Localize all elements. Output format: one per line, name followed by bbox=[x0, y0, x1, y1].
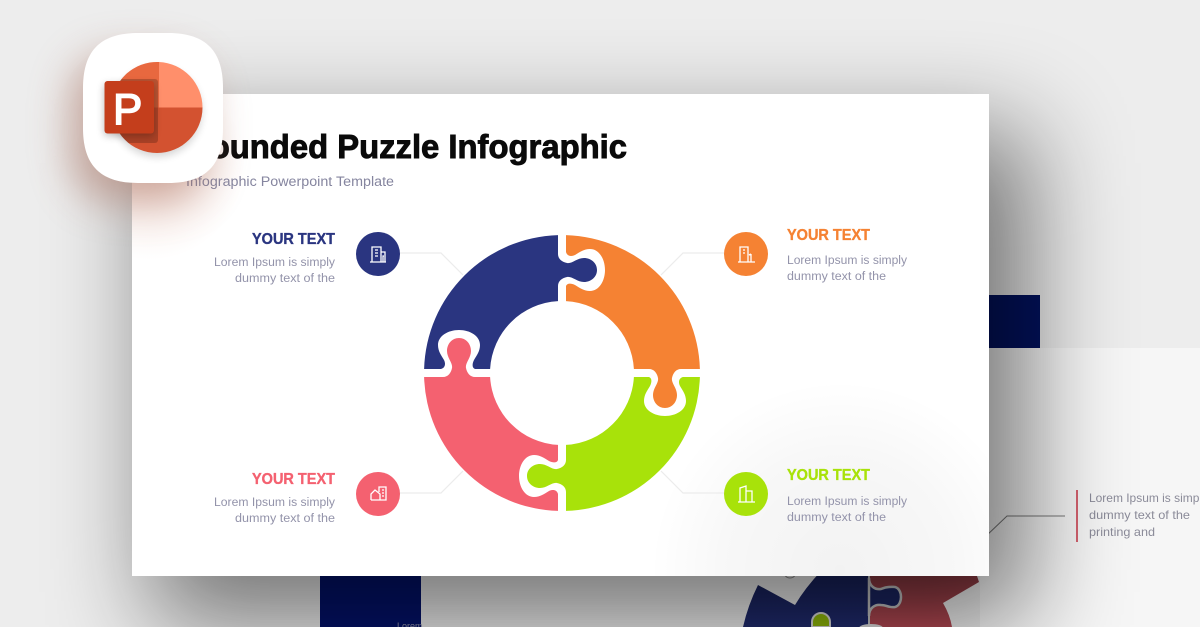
slide glow bbox=[132, 94, 332, 284]
logo disc top right bbox=[159, 62, 203, 108]
body text bbox=[214, 257, 335, 285]
heading: YOUR TEXT bbox=[252, 231, 335, 248]
body text: dummy text of the bbox=[235, 273, 335, 285]
title: Rounded Puzzle Infographic bbox=[186, 128, 627, 165]
background ring hints bbox=[784, 566, 796, 578]
callout: top right bbox=[724, 227, 907, 283]
body text: Lorem Ipsum is simply bbox=[787, 496, 907, 508]
body text: Lorem Ipsum is simply bbox=[214, 257, 335, 269]
background slide: lower right bbox=[980, 348, 1200, 627]
heading: YOUR TEXT bbox=[252, 471, 335, 488]
callout: top left bbox=[214, 231, 400, 285]
red rule bbox=[1076, 490, 1078, 542]
icon: office building bbox=[356, 232, 400, 276]
body text bbox=[214, 497, 335, 525]
background puzzle red piece bbox=[870, 570, 979, 627]
logo shadow bbox=[112, 67, 202, 157]
body text: dummy text of the bbox=[787, 271, 886, 283]
icon: door building bbox=[724, 232, 768, 276]
body text bbox=[1089, 491, 1200, 539]
logo inner shade bbox=[120, 79, 158, 143]
puzzle piece: orange bbox=[566, 235, 700, 408]
body text: dummy text of the bbox=[1089, 508, 1190, 522]
puzzle piece: navy bbox=[424, 235, 597, 369]
card shadow bbox=[150, 130, 1030, 625]
icon: house and tower bbox=[356, 472, 400, 516]
body text: dummy text of the bbox=[787, 512, 886, 524]
body text: printing and bbox=[1089, 525, 1155, 539]
chart: rounded puzzle ring bbox=[424, 235, 700, 511]
logo letter: P bbox=[113, 85, 142, 134]
background puzzle: partial bbox=[743, 566, 979, 627]
background text: right bbox=[985, 490, 1200, 542]
callout: bottom right bbox=[724, 467, 907, 524]
body text: dummy text of the bbox=[235, 513, 335, 525]
background puzzle navy piece bbox=[743, 570, 868, 627]
callout: bottom left bbox=[214, 471, 400, 525]
panel: main slide bbox=[132, 94, 989, 576]
badge squircle bbox=[83, 33, 223, 183]
puzzle piece: green bbox=[527, 377, 700, 511]
background puzzle seam bbox=[868, 576, 870, 627]
heading: YOUR TEXT bbox=[787, 467, 870, 484]
background navy block: bottom bbox=[320, 570, 421, 627]
icon: PowerPoint app badge bbox=[69, 33, 223, 203]
background puzzle tab bbox=[869, 578, 901, 616]
body text: Lorem Ipsum is simply bbox=[214, 497, 335, 509]
background puzzle green tab bbox=[812, 613, 830, 627]
background navy block: right bbox=[989, 295, 1040, 348]
body text bbox=[787, 255, 907, 283]
connector lines bbox=[400, 253, 724, 493]
subtitle: Infographic Powerpoint Template bbox=[186, 174, 394, 189]
logo square shadow bbox=[104, 84, 154, 136]
slide tint bbox=[132, 94, 989, 576]
logo square bbox=[104, 81, 154, 134]
heading: YOUR TEXT bbox=[787, 227, 870, 244]
slide card bbox=[132, 94, 989, 576]
background puzzle white tab bbox=[859, 624, 883, 627]
body text bbox=[787, 496, 907, 524]
body text: Lorem Ipsum is simply bbox=[787, 255, 907, 267]
connector line bbox=[985, 516, 1065, 537]
icon: towers bbox=[724, 472, 768, 516]
puzzle piece: pink bbox=[424, 338, 558, 511]
logo disc top left bbox=[111, 62, 159, 108]
badge glow bbox=[69, 53, 209, 203]
logo disc bottom bbox=[112, 108, 202, 153]
